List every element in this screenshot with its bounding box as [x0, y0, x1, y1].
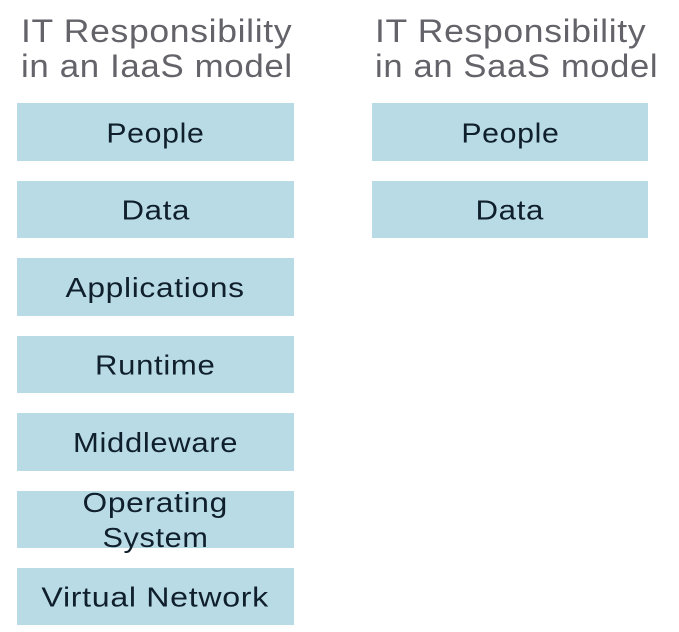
box: Applications: Applications: [66, 271, 245, 302]
heading: SaaS column: [375, 13, 658, 84]
box: Middleware: Middleware: [73, 426, 238, 457]
heading: IaaS column: in an IaaS model: [21, 48, 293, 84]
box: Data: Data: [476, 194, 544, 226]
box: Applications: [17, 258, 294, 316]
panel: IaaS responsibility stack: [17, 103, 294, 625]
box: Middleware: [17, 413, 294, 471]
box: Runtime: [17, 336, 294, 393]
box: People: People: [106, 117, 205, 148]
box: Runtime: Runtime: [95, 350, 216, 380]
box: People: [17, 103, 294, 161]
box: Operating System: Operating: [83, 486, 228, 517]
box: Operating System: [17, 491, 294, 548]
box: People: [372, 103, 648, 161]
heading: IaaS column: IT Responsibility: [21, 13, 292, 49]
box: Operating System: System: [102, 521, 209, 552]
box: Virtual Network: Virtual Network: [42, 582, 269, 612]
box: People: People: [461, 117, 559, 148]
box: Data: [372, 181, 648, 238]
box: Data: [17, 181, 294, 238]
heading: SaaS column: IT Responsibility: [375, 13, 646, 49]
box: Virtual Network: [17, 568, 294, 625]
heading: IaaS column: [21, 13, 293, 84]
panel: SaaS responsibility stack: [372, 103, 648, 238]
box: Data: Data: [121, 194, 190, 226]
heading: SaaS column: in an SaaS model: [375, 48, 658, 84]
